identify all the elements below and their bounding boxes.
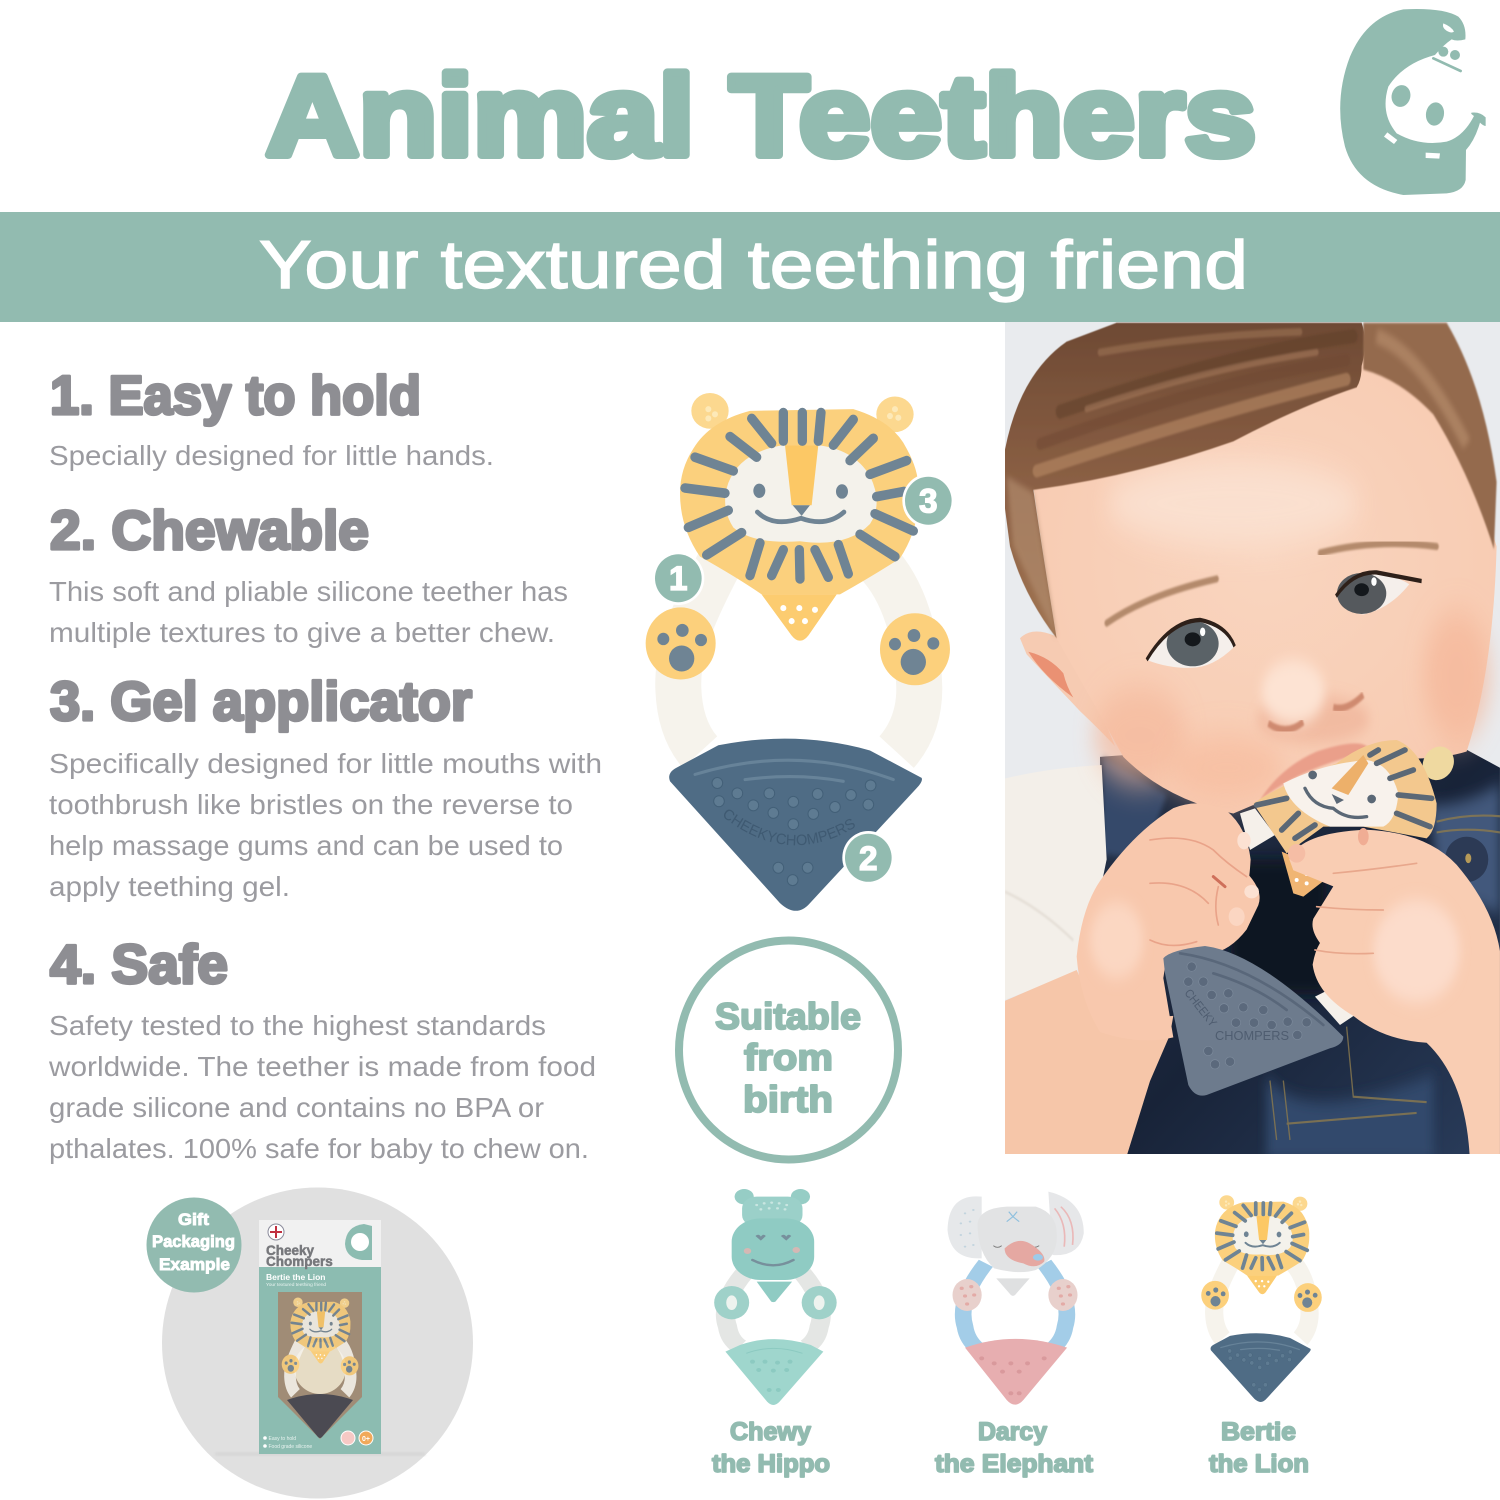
package: Cheeky xyxy=(266,1243,315,1258)
feature 4: safe: Safety tested to the highest standards xyxy=(49,1010,546,1041)
label xyxy=(712,1418,830,1478)
label xyxy=(1209,1418,1309,1478)
white shirt xyxy=(1005,765,1107,1000)
lips xyxy=(1260,743,1370,800)
lion teether in mouth xyxy=(1240,740,1460,897)
eye left xyxy=(1147,620,1235,668)
callout 2 xyxy=(842,831,894,885)
label: Bertie xyxy=(1221,1418,1296,1446)
feature 3: gel applicator xyxy=(49,670,602,902)
button xyxy=(1445,837,1488,882)
title: Animal Teethers xyxy=(266,53,1256,180)
label: the Elephant xyxy=(935,1450,1094,1478)
package: 0+ xyxy=(362,1436,370,1443)
feature 3: gel applicator: 3. Gel applicator xyxy=(50,670,472,732)
package: Chompers xyxy=(266,1254,333,1269)
feature 3: gel applicator: apply teething gel. xyxy=(49,871,290,902)
grey circle backdrop xyxy=(162,1188,473,1498)
feature 3: gel applicator: Specifically designed for little mouths with xyxy=(49,748,602,779)
badge: gift packaging example: Packaging xyxy=(152,1232,235,1251)
feature 2: chewable: 2. Chewable xyxy=(50,499,369,561)
package: Easy to hold xyxy=(268,1436,296,1442)
teether lettering: CHOMPERS xyxy=(1215,1028,1289,1043)
teether: Darcy the Elephant xyxy=(935,1192,1094,1478)
left hand xyxy=(1077,803,1260,1040)
finger details: right hand xyxy=(1288,828,1417,954)
finger details: left hand xyxy=(1150,832,1259,945)
badge: suitable from birth xyxy=(679,940,898,1160)
denim overalls xyxy=(1100,741,1500,1161)
teether: Chewy the Hippo xyxy=(712,1189,837,1478)
label: the Lion xyxy=(1209,1450,1309,1478)
badge: gift packaging example: Example xyxy=(159,1255,230,1274)
feature 4: safe: 4. Safe xyxy=(50,933,228,995)
gift packaging example xyxy=(146,1188,473,1498)
ear xyxy=(1020,632,1115,746)
package: Bertie the Lion xyxy=(266,1272,326,1282)
eye right xyxy=(1336,572,1409,615)
right hand and forearm xyxy=(1289,830,1500,1161)
photo: baby chewing lion teether xyxy=(1005,322,1500,1161)
hair xyxy=(1005,323,1365,638)
feature 2: chewable xyxy=(49,499,568,648)
label: the Hippo xyxy=(712,1450,830,1478)
feature 3: gel applicator: toothbrush like bristles on the reverse to xyxy=(49,789,573,820)
feature 1: easy to hold: Specially designed for little hands. xyxy=(49,440,494,471)
badge: gift packaging example: Gift xyxy=(178,1210,209,1229)
subtitle banner: Your textured teething friend xyxy=(259,227,1248,303)
teether lettering: CHEEKY xyxy=(1182,986,1220,1030)
main lion teether with numbered callouts xyxy=(646,393,952,911)
subtitle banner xyxy=(0,212,1500,322)
callout 3: 3 xyxy=(919,482,938,521)
eyebrows xyxy=(1107,579,1217,623)
callout 3 xyxy=(902,474,954,527)
feature 1: easy to hold xyxy=(49,364,494,471)
callout 2: 2 xyxy=(859,839,878,878)
label xyxy=(935,1418,1094,1478)
feature 4: safe: pthalates. 100% safe for baby to chew on. xyxy=(49,1133,589,1164)
label: Darcy xyxy=(978,1418,1047,1446)
logo: cheeky chompers C with hippo face xyxy=(1340,9,1486,195)
badge: suitable from birth: birth xyxy=(743,1079,833,1120)
teether: Bertie the Lion xyxy=(1201,1195,1322,1478)
feature 3: gel applicator: help massage gums and can be used to xyxy=(49,830,563,861)
package: Food grade silicone xyxy=(268,1444,312,1450)
package: Your textured teething friend xyxy=(266,1282,326,1288)
feature 2: chewable: This soft and pliable silicone teether has xyxy=(49,576,568,607)
gel tip of teether xyxy=(1163,946,1343,1096)
feature 2: chewable: multiple textures to give a better chew. xyxy=(49,617,555,648)
badge: gift packaging example xyxy=(146,1198,242,1292)
feature 4: safe xyxy=(48,933,596,1164)
package xyxy=(215,1220,425,1456)
label: Chewy xyxy=(730,1418,811,1446)
forearm left xyxy=(1005,970,1173,1161)
badge: suitable from birth: Suitable xyxy=(715,996,861,1037)
callout 1: 1 xyxy=(669,560,688,598)
feature 4: safe: worldwide. The teether is made from food xyxy=(48,1051,596,1082)
feature 1: easy to hold: 1. Easy to hold xyxy=(50,364,421,426)
callout 1 xyxy=(652,552,704,605)
feature 4: safe: grade silicone and contains no BPA or xyxy=(49,1092,544,1123)
face xyxy=(1033,352,1497,814)
teether ring piece xyxy=(1315,992,1354,1025)
nose xyxy=(1257,695,1370,743)
badge: suitable from birth: from xyxy=(744,1037,833,1078)
main lion teether with numbered callouts: CHEEKYCHOMPERS xyxy=(724,810,855,846)
